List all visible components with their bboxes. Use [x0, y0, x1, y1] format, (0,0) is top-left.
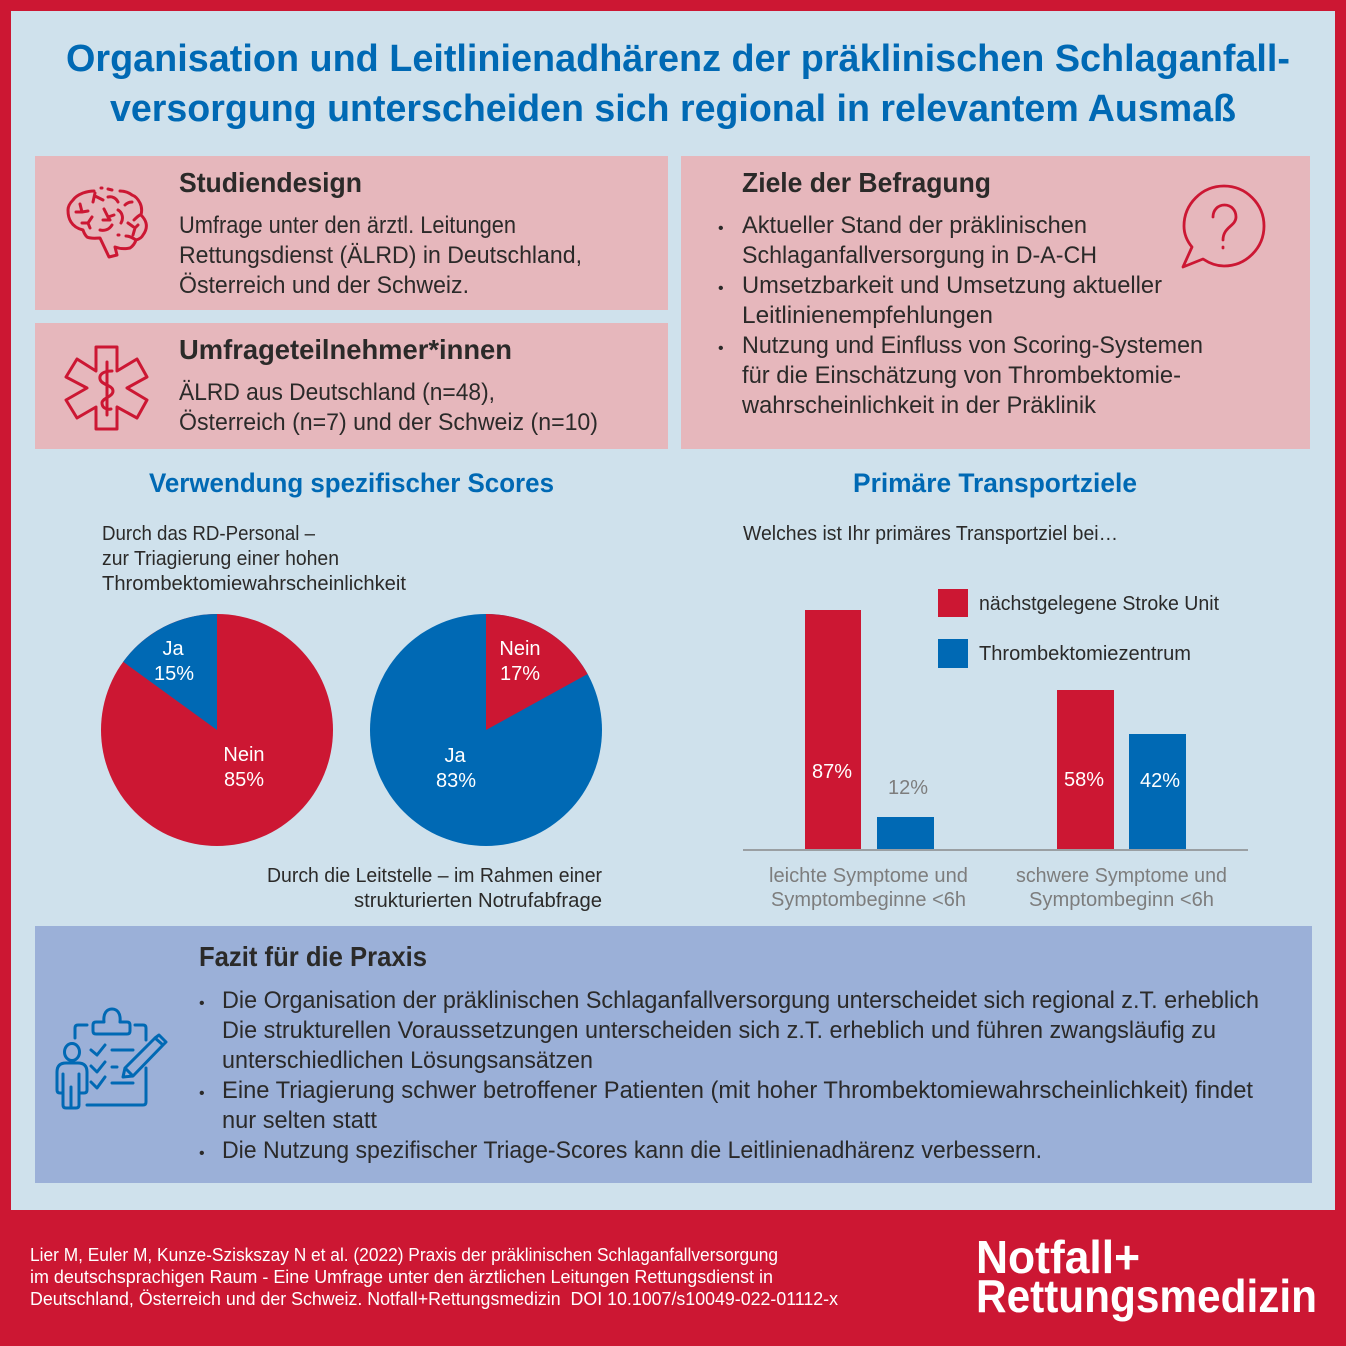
pie chart: Leitstelle: Ja — [444, 745, 466, 767]
bullet list: • — [718, 220, 724, 237]
bullet list: für die Einschätzung von Thrombektomie- — [742, 362, 1181, 389]
citation: Lier M, Euler M, Kunze-Sziskszay N et al. (2022) Praxis der präklinischen Schlaganfallversorgung — [30, 1245, 778, 1265]
bullet list: wahrscheinlichkeit in der Präklinik — [741, 392, 1097, 419]
legend: Thrombektomiezentrum — [979, 643, 1191, 665]
panel: Umfrageteilnehmer — [35, 323, 668, 449]
bullet list: Umsetzbarkeit und Umsetzung aktueller — [742, 272, 1162, 299]
bullet list: • — [199, 995, 205, 1012]
pie chart: Leitstelle: Nein — [499, 638, 541, 660]
icon: question bubble — [1183, 186, 1264, 267]
caption: Leitstelle — [267, 865, 602, 912]
pie chart: RD-Personal: 85% — [224, 769, 264, 791]
bullet list: • — [718, 340, 724, 357]
pie chart: Leitstelle: 83% — [436, 770, 476, 792]
pie chart: RD-Personal: Ja — [162, 638, 184, 660]
logo: Notfall+Rettungsmedizin: Notfall+ — [976, 1231, 1140, 1283]
bar chart: schwere Symptome und — [1016, 865, 1227, 887]
text block: Rettungsdienst (ÄLRD) in Deutschland, — [179, 242, 582, 269]
legend — [938, 589, 1219, 668]
caption: Leitstelle: strukturierten Notrufabfrage — [354, 890, 602, 912]
title: versorgung unterscheiden sich regional in relevantem Ausmaß — [110, 88, 1236, 130]
pie chart: RD-Personal — [101, 614, 333, 846]
bullet list: Schlaganfallversorgung in D-A-CH — [742, 242, 1097, 269]
bullet list: Aktueller Stand der präklinischen — [742, 212, 1087, 239]
bar chart: Symptombeginn <6h — [1029, 889, 1214, 911]
text block: ÄLRD aus Deutschland (n=48), — [179, 379, 495, 406]
bullet list: nur selten statt — [222, 1107, 377, 1134]
bullet list: unterschiedlichen Lösungsansätzen — [222, 1047, 593, 1074]
bullet list: Leitlinienempfehlungen — [742, 302, 993, 329]
bullet list: Die Nutzung spezifischer Triage-Scores kann die Leitlinienadhärenz verbessern. — [222, 1137, 1042, 1164]
heading: Studiendesign — [179, 167, 362, 198]
caption: RD-Personal: Durch das RD-Personal – — [102, 523, 316, 545]
pie chart: RD-Personal: 15% — [154, 663, 194, 685]
bullet list — [199, 987, 1259, 1164]
citation: Deutschland, Österreich und der Schweiz. Notfall+Rettungsmedizin DOI 10.1007/s10049-022-01112-x — [30, 1289, 838, 1309]
logo: Notfall+Rettungsmedizin — [976, 1231, 1317, 1322]
bullet list: Die Organisation der präklinischen Schlaganfallversorgung unterscheidet sich regional z.T. erheblich — [222, 987, 1259, 1014]
pie chart: Leitstelle: 17% — [500, 663, 540, 685]
bullet list: • — [718, 280, 724, 297]
bar chart: 58% — [1064, 769, 1104, 791]
citation — [30, 1245, 838, 1309]
bar chart: 42% — [1140, 770, 1180, 792]
title: Organisation und Leitlinienadhärenz der präklinischen Schlaganfall- — [66, 38, 1290, 80]
icon: clipboard with person — [57, 1009, 166, 1108]
caption: RD-Personal: zur Triagierung einer hohen — [102, 548, 339, 570]
title — [66, 38, 1290, 130]
text block: Österreich und der Schweiz. — [179, 272, 469, 299]
panel: Ziele der Befragung — [681, 156, 1310, 449]
caption: Leitstelle: Durch die Leitstelle – im Rahmen einer — [267, 865, 602, 887]
bullet list: Nutzung und Einfluss von Scoring-Systemen — [742, 332, 1203, 359]
heading: Fazit für die Praxis — [199, 941, 427, 972]
legend: nächstgelegene Stroke Unit — [979, 593, 1219, 615]
bullet list: • — [199, 1145, 205, 1162]
text block — [179, 379, 598, 436]
pie chart: RD-Personal: Nein — [223, 744, 265, 766]
logo: Notfall+Rettungsmedizin: Rettungsmedizin — [976, 1270, 1317, 1322]
bullet list: • — [199, 1085, 205, 1102]
panel: Studiendesign — [35, 156, 668, 310]
icon: star of life — [66, 347, 147, 429]
question text: Welches ist Ihr primäres Transportziel bei… — [743, 523, 1118, 545]
panel: Fazit für die Praxis — [35, 926, 1312, 1183]
heading: Verwendung spezifischer Scores: Verwendung spezifischer Scores — [149, 468, 554, 498]
text block — [179, 212, 582, 299]
bullet list: Eine Triagierung schwer betroffener Patienten (mit hoher Thrombektomiewahrscheinlichkeit) findet — [222, 1077, 1253, 1104]
heading: Ziele der Befragung — [742, 167, 991, 198]
bullet list: Die strukturellen Voraussetzungen unterscheiden sich z.T. erheblich und führen zwangsläufig zu — [222, 1017, 1216, 1044]
text block: Umfrage unter den ärztl. Leitungen — [179, 212, 516, 239]
heading: Primäre Transportziele: Primäre Transportziele — [853, 468, 1137, 498]
citation: im deutschsprachigen Raum - Eine Umfrage unter den ärztlichen Leitungen Rettungsdienst in — [30, 1267, 773, 1287]
icon: brain — [68, 188, 146, 257]
bar chart: Symptombeginne <6h — [771, 889, 966, 911]
caption: RD-Personal — [102, 523, 406, 595]
text block: Österreich (n=7) und der Schweiz (n=10) — [179, 409, 598, 436]
bullet list — [718, 212, 1203, 419]
bar chart: 87% — [812, 761, 852, 783]
pie chart: Leitstelle — [370, 614, 602, 846]
caption: RD-Personal: Thrombektomiewahrscheinlichkeit — [102, 573, 406, 595]
bar chart: 12% — [888, 777, 928, 799]
bar chart: leichte Symptome und — [769, 865, 968, 887]
bar chart — [743, 610, 1248, 911]
heading: Umfrageteilnehmer*innen — [179, 334, 512, 365]
